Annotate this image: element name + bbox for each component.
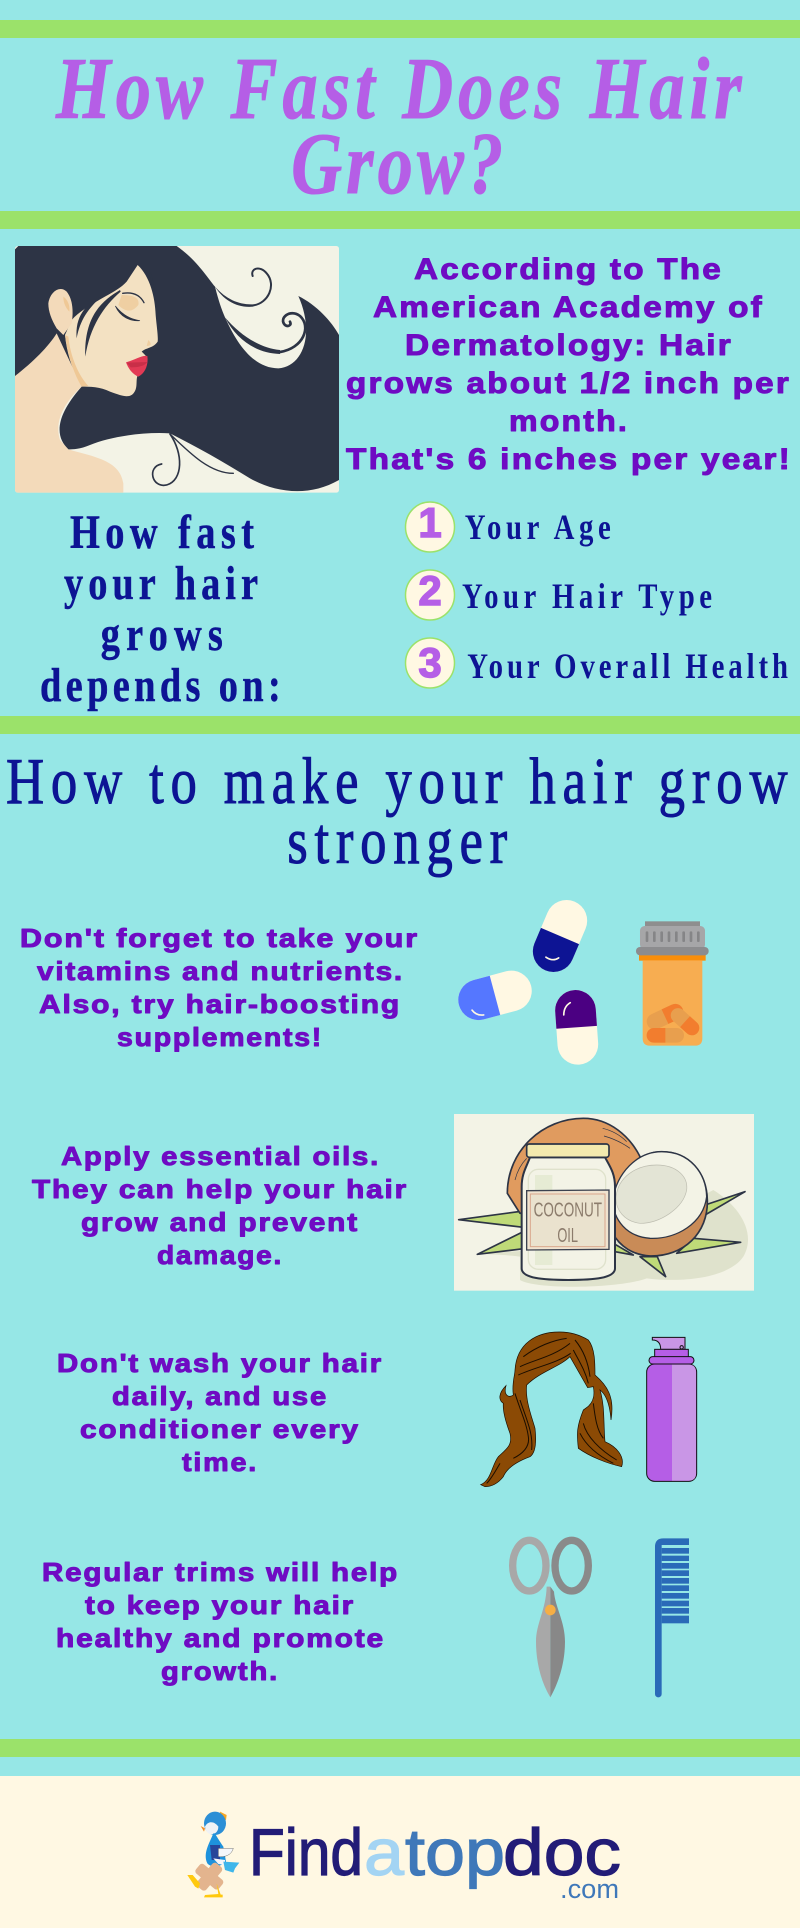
factor 3: your overall health [406,638,788,688]
tip 4: regular trims: growth. [161,1656,279,1686]
heading: how fast your hair grows depends on: grows [101,608,223,661]
tip 3: washing and conditioner: time. [182,1447,258,1477]
icon: capsules and pill bottle [454,894,709,1066]
factor 3: your overall health: Your Overall Health [467,647,788,687]
intro text: dermatology fact: month. [509,405,629,438]
intro text: dermatology fact: According to The [414,253,723,286]
heading: how to make your hair grow stronger [6,744,788,877]
tip 2: essential oils: Apply essential oils. [61,1141,380,1171]
factor 1: your age: Your Age [465,508,611,548]
factor 1: your age: 1 [418,499,442,546]
tip 3: washing and conditioner: Don't wash your hair [57,1348,383,1378]
factor 2: your hair type [406,567,712,620]
heading: how fast your hair grows depends on: depends on: [40,659,281,712]
heading: how fast your hair grows depends on [40,506,281,712]
tip 2: essential oils [32,1141,408,1270]
intro text: dermatology fact: Dermatology: Hair [405,329,733,362]
intro text: dermatology fact [346,253,792,476]
logo: duck mascot [187,1812,239,1898]
tip 2: essential oils: They can help your hair [32,1174,408,1204]
logo: findatopdoc wordmark: Find [249,1815,363,1889]
tip 1: vitamins: vitamins and nutrients. [37,956,404,986]
title: Grow? [291,116,503,213]
tip 4: regular trims: Regular trims will help [42,1557,399,1587]
logo: findatopdoc wordmark [249,1815,621,1904]
tip 3: washing and conditioner: conditioner every [80,1414,360,1444]
heading: how fast your hair grows depends on: your hair [64,557,258,610]
panel: footer [0,1776,800,1928]
tip 4: regular trims: healthy and promote [56,1623,385,1653]
icon: comb [655,1538,689,1697]
title: How Fast Does Hair [55,41,742,138]
tip 4: regular trims [42,1557,399,1686]
tip 4: regular trims: to keep your hair [85,1590,355,1620]
factor 3: your overall health: 3 [418,639,442,686]
tip 1: vitamins: Don't forget to take your [20,923,419,953]
intro text: dermatology fact: grows about 1/2 inch per [346,367,791,400]
tip 3: washing and conditioner [57,1348,383,1477]
intro text: dermatology fact: That's 6 inches per year! [346,443,792,476]
tip 3: washing and conditioner: daily, and use [112,1381,328,1411]
title [55,41,742,213]
tip 2: essential oils: grow and prevent [81,1207,359,1237]
factor 2: your hair type: Your Hair Type [462,577,712,617]
factor 1: your age [406,499,611,552]
heading: how fast your hair grows depends on: How fast [70,506,254,559]
tip 2: essential oils: damage. [157,1240,283,1270]
icon: conditioner bottle [647,1337,697,1481]
illustration: coconut oil jar: OIL [557,1225,578,1247]
icon: brown hair [481,1332,622,1487]
tip 1: vitamins: supplements! [117,1022,323,1052]
intro text: dermatology fact: American Academy of [373,291,764,324]
illustration: coconut oil jar [454,1114,754,1291]
logo: findatopdoc wordmark: .com [560,1874,619,1904]
illustration: woman with flowing hair [15,246,339,493]
heading: how to make your hair grow stronger: stronger [287,804,507,877]
tip 1: vitamins: Also, try hair-boosting [39,989,401,1019]
illustration: coconut oil jar: COCONUT [534,1200,602,1222]
factor 2: your hair type: 2 [418,567,442,614]
logo: findatopdoc wordmark: a [364,1815,404,1889]
icon: scissors [513,1540,588,1697]
heading: how to make your hair grow stronger: How to make your hair grow [6,744,788,817]
logo: findatopdoc wordmark: doc [503,1815,621,1889]
tip 1: vitamins [20,923,419,1052]
logo: findatopdoc wordmark: top [405,1815,505,1889]
